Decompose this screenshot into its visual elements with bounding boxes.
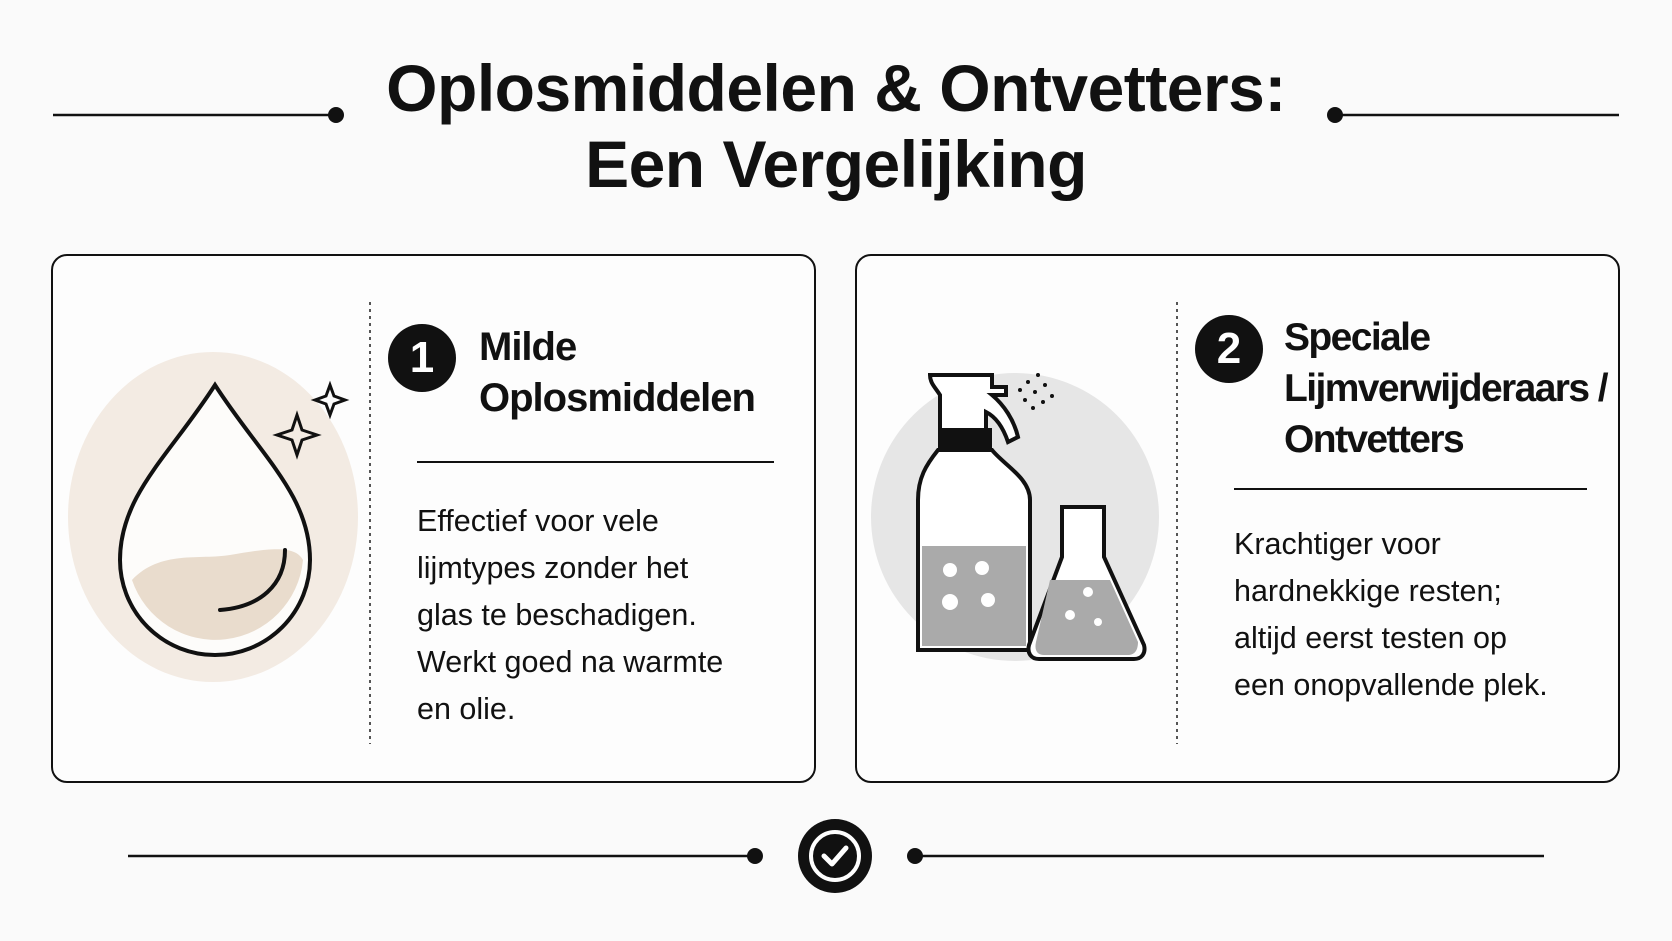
divider left	[369, 302, 371, 744]
body 1: Werkt goed na warmte	[417, 645, 723, 679]
number 1	[388, 324, 456, 392]
title: Oplosmiddelen & Ontvetters:	[386, 51, 1286, 125]
panel: special removers	[855, 254, 1620, 783]
heading 1: Oplosmiddelen	[479, 376, 755, 420]
number 2: 2	[1217, 324, 1241, 373]
icon: spray bottle and flask	[871, 373, 1159, 661]
heading 1	[479, 325, 755, 420]
body 2: een onopvallende plek.	[1234, 668, 1548, 702]
icon: check mark	[798, 819, 872, 893]
body 1: lijmtypes zonder het	[417, 551, 688, 585]
heading 2: Speciale	[1284, 316, 1429, 359]
title	[386, 51, 1286, 201]
number 1: 1	[410, 333, 434, 382]
body 2: altijd eerst testen op	[1234, 621, 1507, 655]
body 1	[417, 504, 723, 726]
body 1: glas te beschadigen.	[417, 598, 697, 632]
icon: droplet	[68, 352, 358, 682]
body 2: hardnekkige resten;	[1234, 574, 1502, 608]
rule 1	[417, 461, 774, 463]
body 1: Effectief voor vele	[417, 504, 659, 538]
title: Een Vergelijking	[585, 127, 1087, 201]
heading 1: Milde	[479, 325, 576, 369]
body 2	[1234, 527, 1548, 702]
rule 2	[1234, 488, 1587, 490]
heading 2: Lijmverwijderaars /	[1284, 367, 1607, 410]
body 1: en olie.	[417, 692, 515, 726]
heading 2	[1284, 316, 1608, 461]
number 2	[1195, 315, 1263, 383]
panel: mild solvents	[51, 254, 816, 783]
heading 2: Ontvetters	[1284, 418, 1463, 461]
body 2: Krachtiger voor	[1234, 527, 1441, 561]
divider right	[1176, 302, 1178, 744]
